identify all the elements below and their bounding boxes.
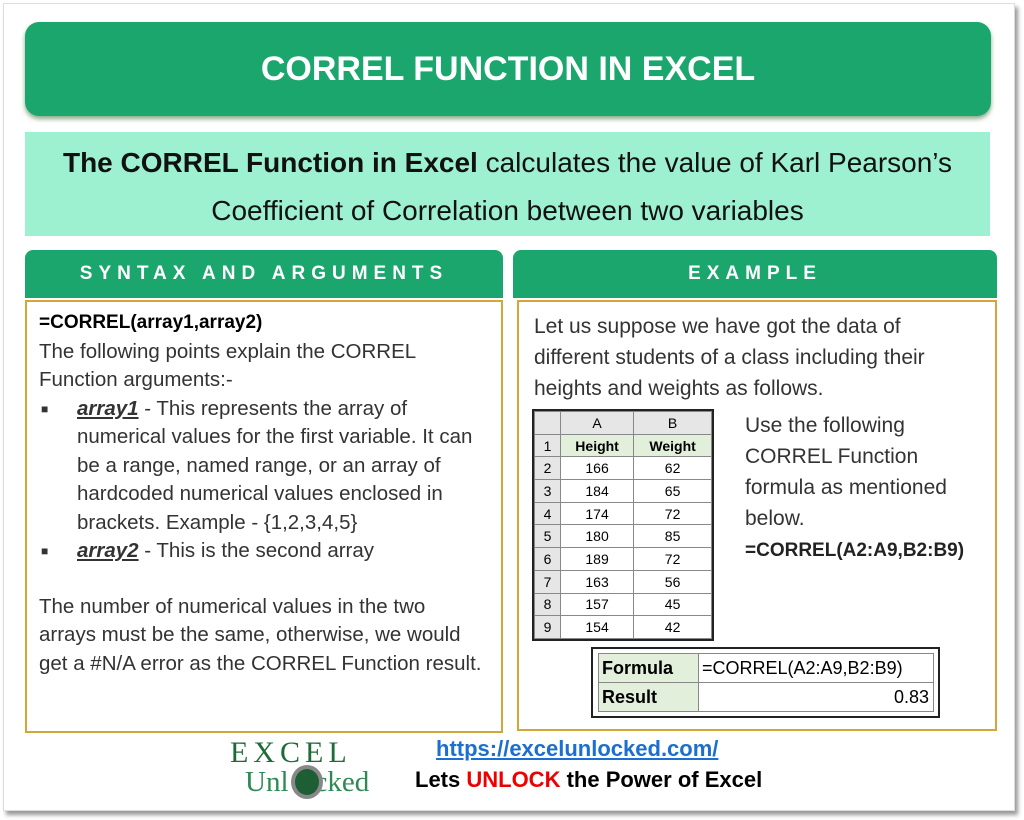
result table: Result [602, 686, 657, 706]
example intro: Let us suppose we have got the data of [534, 315, 901, 338]
data table: 56 [665, 574, 680, 590]
syntax text: be a range, named range, or an array of [77, 454, 441, 476]
logo: EXCEL [230, 736, 352, 769]
data table [532, 409, 714, 641]
syntax text: ■ [41, 402, 48, 416]
data table: 6 [544, 551, 551, 567]
data table: 189 [585, 551, 609, 567]
data table: 157 [585, 596, 609, 612]
syntax text: brackets. Example - {1,2,3,4,5} [77, 510, 357, 534]
data table: 42 [665, 619, 680, 635]
icon: lock [291, 765, 323, 799]
panel: syntax [25, 300, 503, 733]
definition banner: Coefficient of Correlation between two variables [211, 195, 804, 226]
data table: 163 [585, 574, 609, 590]
result table [591, 647, 940, 718]
definition banner [25, 132, 990, 236]
data table: 1 [544, 438, 551, 454]
data table: 45 [665, 596, 680, 612]
data table: 184 [585, 483, 609, 499]
formula instruction [745, 414, 964, 561]
syntax text: array2 - This is the second array [77, 539, 374, 562]
formula instruction: =CORREL(A2:A9,B2:B9) [745, 540, 964, 561]
data table: 7 [544, 574, 551, 590]
header: syntax [25, 250, 503, 298]
data table: 4 [544, 506, 551, 522]
logo: Unl cked [245, 766, 369, 798]
result table: Formula [602, 658, 673, 678]
data table: 62 [665, 460, 680, 476]
result table: =CORREL(A2:A9,B2:B9) [702, 658, 903, 678]
header: example: EXAMPLE [688, 263, 822, 284]
example intro [534, 315, 925, 400]
formula instruction: Use the following [745, 414, 905, 437]
syntax text: ■ [41, 544, 48, 558]
example intro: heights and weights as follows. [534, 377, 824, 400]
syntax text: hardcoded numerical values enclosed in [77, 482, 443, 505]
data table: 85 [665, 528, 680, 544]
syntax text: array1 - This represents the array of [77, 396, 407, 420]
definition banner: The CORREL Function in Excel calculates the value of Karl Pearson’s [63, 147, 952, 178]
header: example [513, 250, 997, 298]
formula instruction: formula as mentioned [745, 476, 947, 499]
logo [230, 736, 369, 799]
data table: B [668, 415, 677, 431]
syntax text: The number of numerical values in the two [39, 594, 425, 618]
tagline: Lets UNLOCK the Power of Excel [415, 767, 762, 792]
syntax text: Function arguments:- [39, 368, 233, 391]
example intro: different students of a class including their [534, 346, 925, 369]
data table: 2 [544, 460, 551, 476]
header: syntax: SYNTAX AND ARGUMENTS [80, 263, 448, 284]
title [25, 22, 991, 116]
syntax text [39, 312, 481, 674]
data table: Weight [649, 438, 696, 454]
data table: 3 [544, 483, 551, 499]
result table: 0.83 [894, 686, 929, 706]
syntax text: numerical values for the first variable. It can [77, 425, 472, 448]
data table: 154 [585, 619, 609, 635]
data table: 9 [544, 619, 551, 635]
panel: example [517, 300, 997, 731]
syntax text: The following points explain the CORREL [39, 340, 416, 362]
data table: 166 [585, 460, 609, 476]
formula instruction: CORREL Function [745, 445, 918, 468]
data table: 180 [585, 528, 609, 544]
link: https://excelunlocked.com/ [436, 736, 718, 761]
syntax text: arrays must be the same, otherwise, we would [39, 623, 461, 646]
data table: 72 [665, 506, 680, 522]
data table: 65 [665, 483, 680, 499]
data table: Height [575, 438, 619, 454]
data table: 72 [665, 551, 680, 567]
data table: 5 [544, 528, 551, 544]
title: CORREL FUNCTION IN EXCEL [261, 50, 755, 88]
formula instruction: below. [745, 507, 805, 530]
syntax text: =CORREL(array1,array2) [39, 312, 262, 333]
data table: 8 [544, 596, 551, 612]
data table: A [592, 415, 602, 431]
data table: 174 [585, 506, 609, 522]
syntax text: get a #N/A error as the CORREL Function result. [39, 652, 481, 674]
